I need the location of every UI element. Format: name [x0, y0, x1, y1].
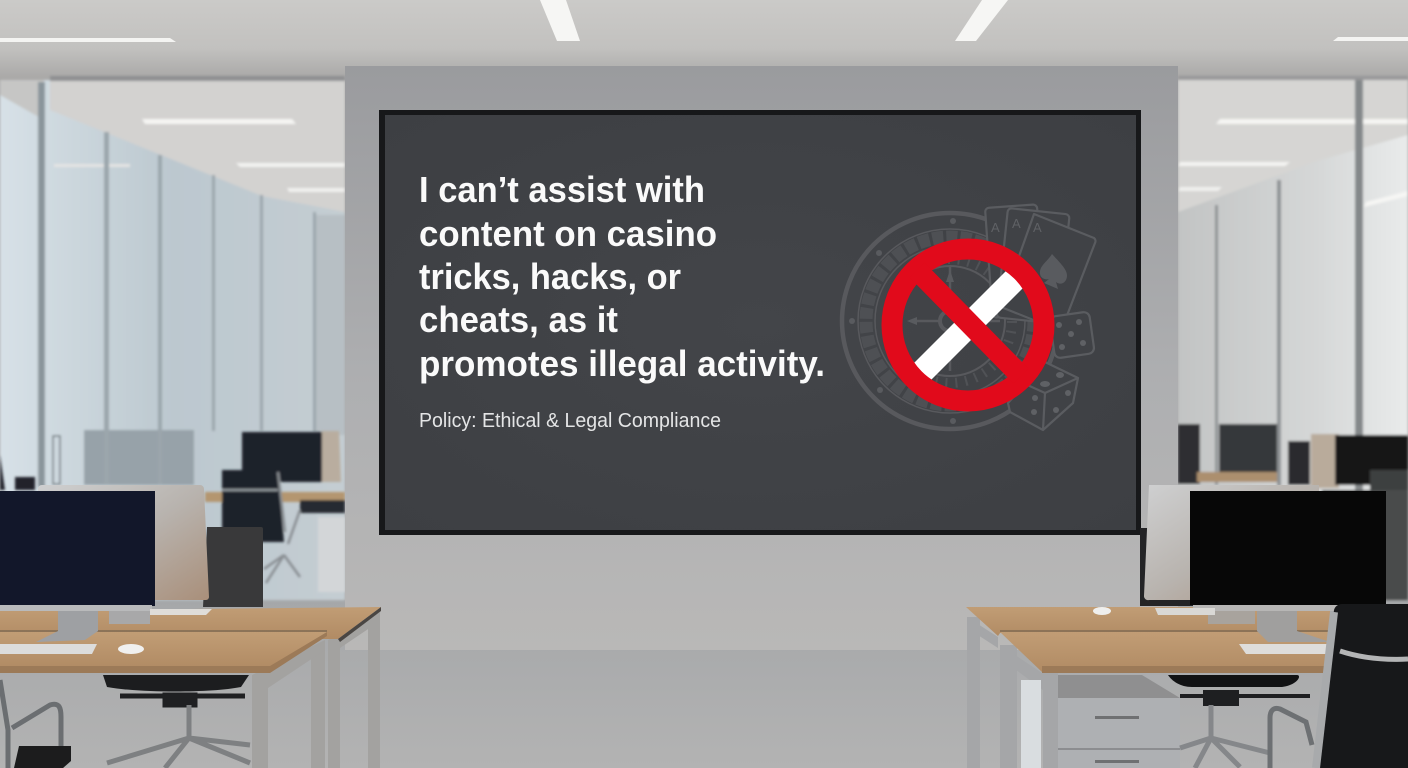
desk legs: [252, 612, 380, 768]
monitor stand: [1208, 611, 1255, 624]
left glass office: [0, 76, 345, 600]
icon: roulette wheel: [842, 213, 1058, 429]
headline: promotes illegal activity.: [419, 343, 825, 384]
background workstation left: [0, 431, 345, 592]
icon: prohibition sign: [892, 249, 1044, 401]
keyboards and mouse: [1155, 608, 1215, 615]
office chair: [103, 675, 249, 692]
keyboards and mouse: [150, 609, 212, 615]
icon: playing cards: A: [1033, 220, 1042, 235]
headline: cheats, as it: [419, 299, 618, 340]
back desk: [966, 607, 1330, 636]
monitor: [0, 491, 155, 606]
headline: I can’t assist with: [419, 169, 705, 210]
headline: tricks, hacks, or: [419, 256, 681, 297]
policy line: Policy: Ethical & Legal Compliance: [419, 410, 721, 432]
near chair arm: [0, 680, 61, 768]
wall display screen: [379, 110, 1141, 535]
headline: [419, 169, 825, 384]
left desk area: [0, 485, 381, 768]
chair behind the desk: [203, 527, 263, 607]
back monitor: [1144, 485, 1321, 600]
desk legs and drawers: [967, 617, 1058, 768]
office chair: [1168, 675, 1299, 687]
icon: playing cards: A: [1012, 216, 1021, 231]
icon: playing cards: [985, 204, 1095, 331]
monitor stand: [109, 611, 150, 624]
front desk: [0, 632, 327, 668]
near chair: [1316, 604, 1408, 768]
floor: [0, 600, 1408, 768]
front desk: [1000, 632, 1340, 672]
chair behind the desk: [1140, 528, 1200, 606]
headline: content on casino: [419, 213, 717, 254]
back monitor: [36, 485, 209, 600]
icon: dice: [1008, 311, 1095, 430]
ceiling: [0, 0, 1408, 80]
icon: playing cards: A: [991, 220, 1000, 235]
monitor: [1190, 491, 1386, 605]
right desk area: [966, 485, 1408, 768]
back desk: [0, 607, 381, 639]
right glass office: [1178, 76, 1408, 600]
feature wall: [345, 66, 1178, 650]
